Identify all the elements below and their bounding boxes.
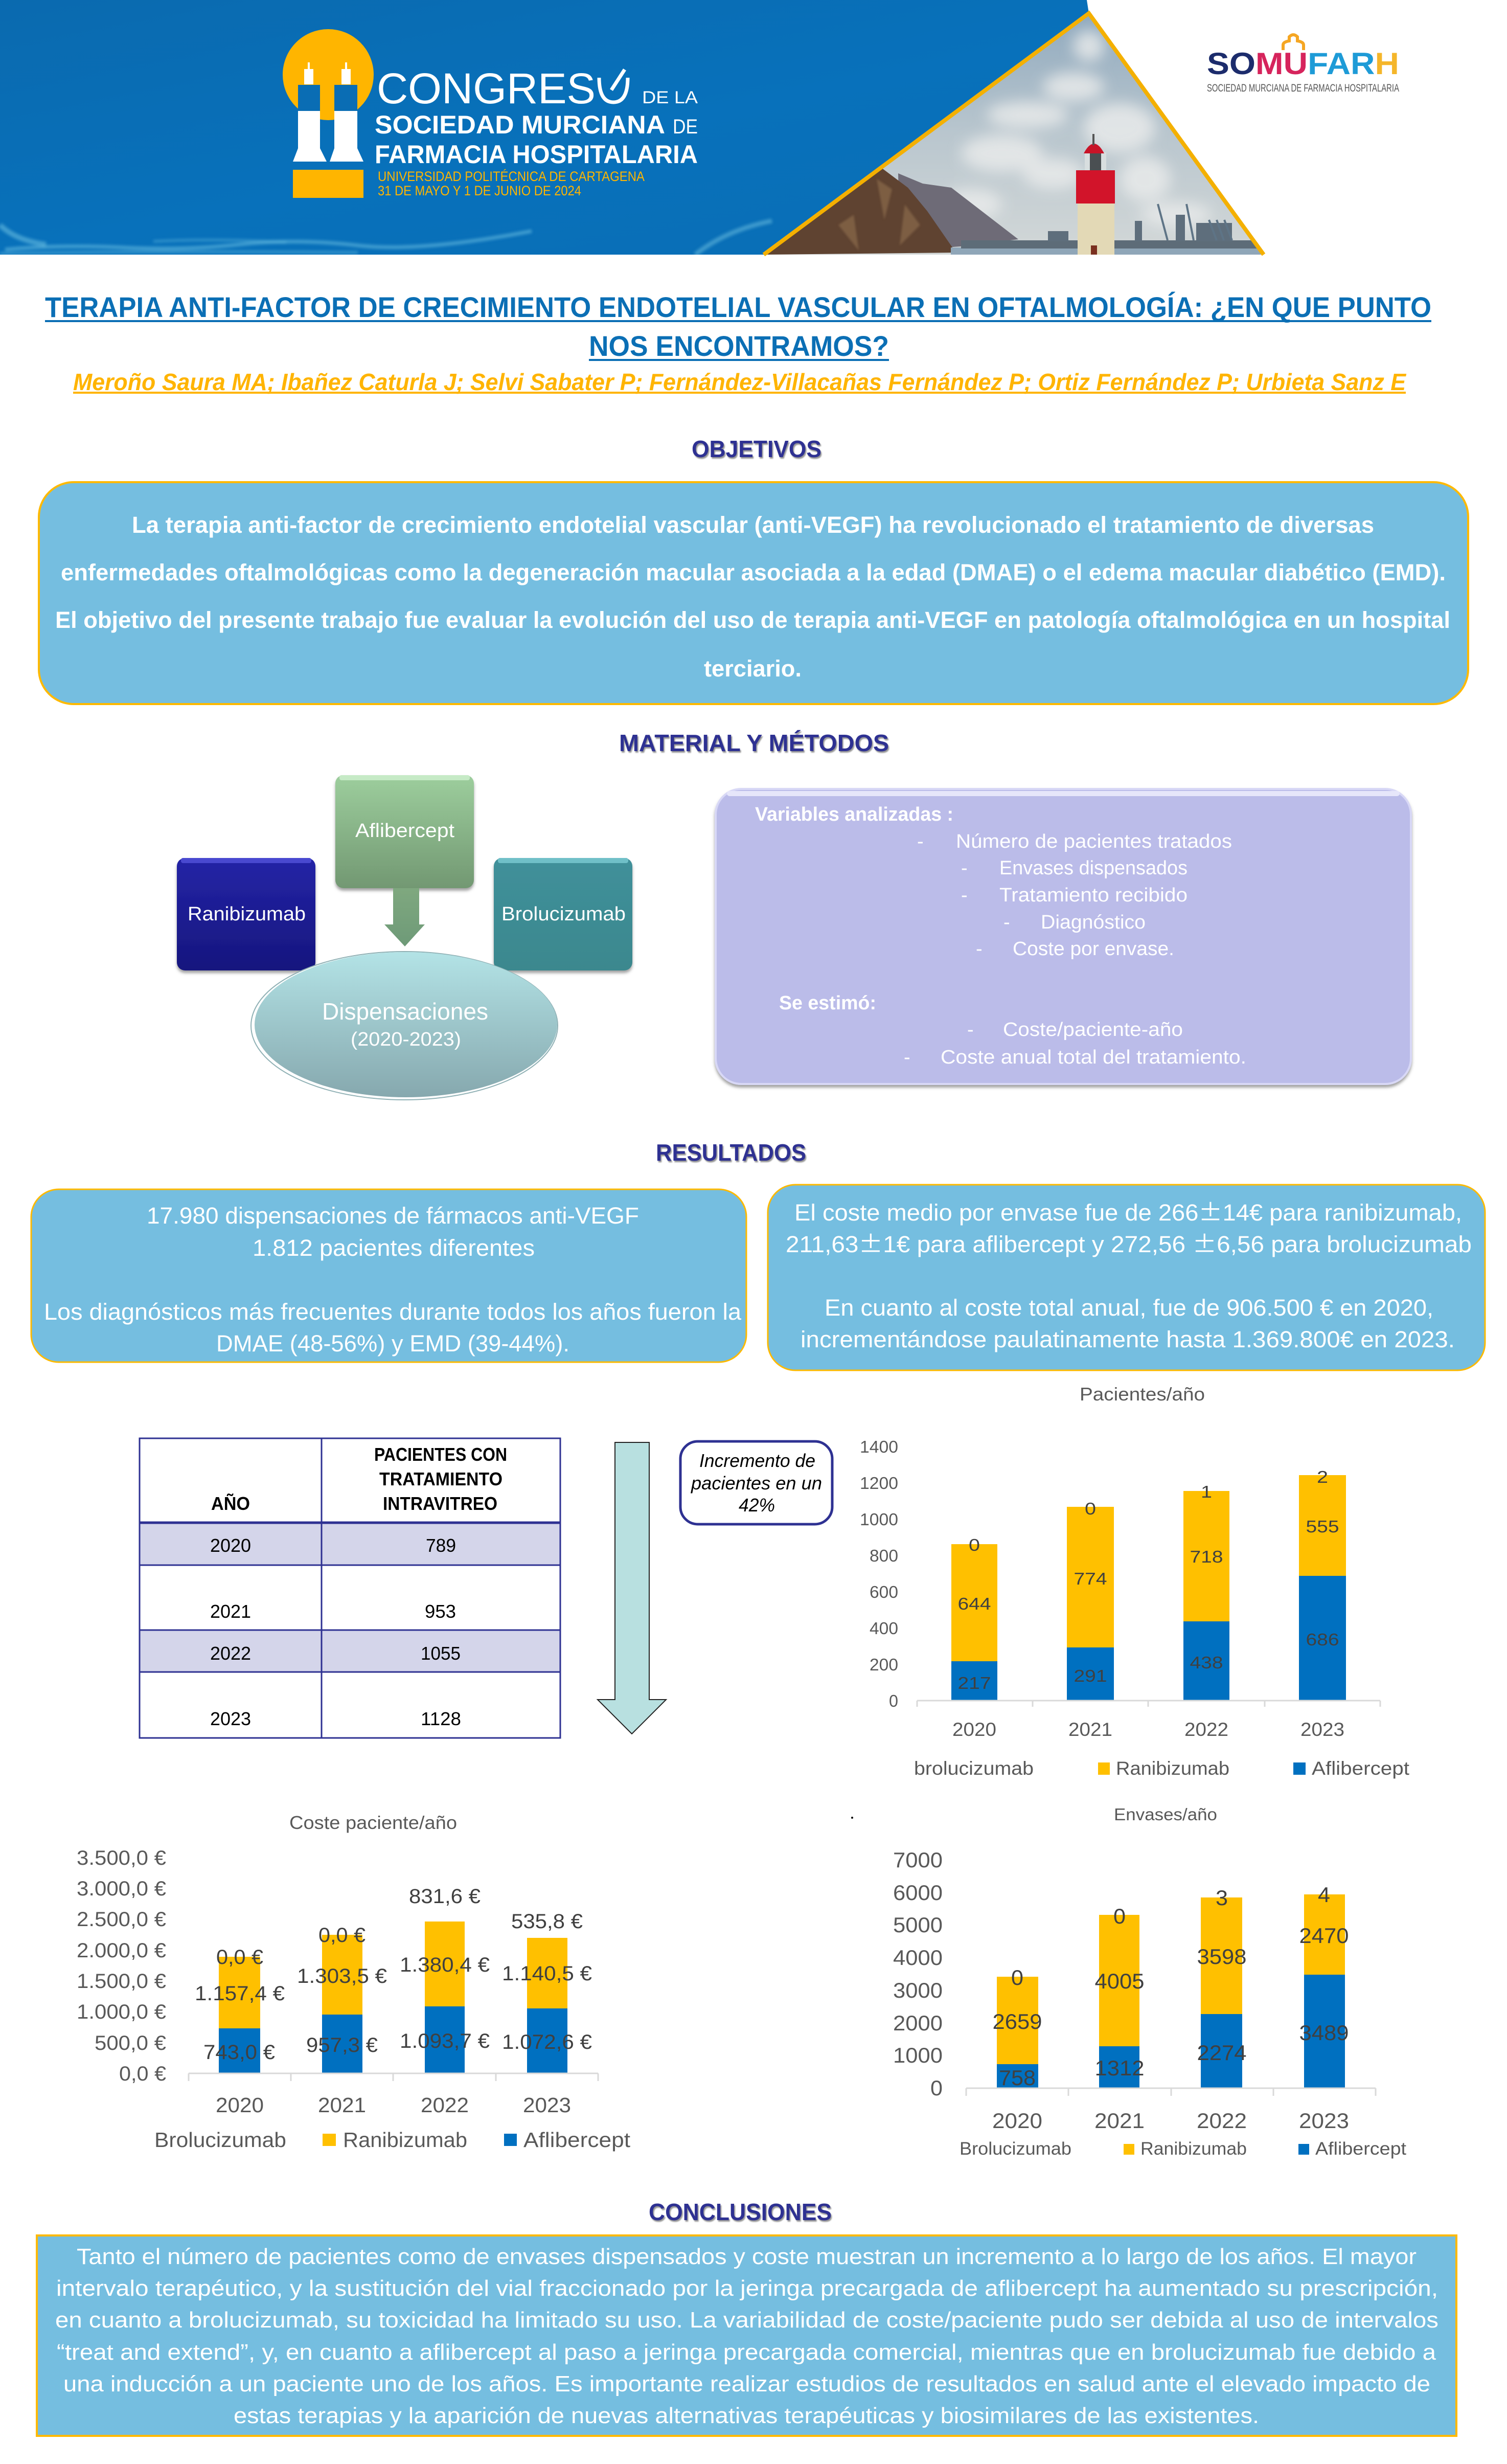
panel: variables analizadas: -	[917, 831, 924, 852]
chart: coste paciente/año: 3.500,0 €	[77, 1847, 166, 1869]
panel: resultados izquierda: 1.812 pacientes diferentes	[253, 1235, 535, 1261]
congress logo: UNIVERSIDAD POLITÉCNICA DE CARTAGENA	[378, 169, 645, 184]
chart: coste paciente/año: 1.157,4 €	[195, 1982, 285, 2005]
panel: variables analizadas: Número de pacientes tratados	[956, 831, 1232, 852]
chart: pacientes/año: 1000	[860, 1510, 898, 1529]
panel: variables analizadas: Envases dispensados	[999, 857, 1188, 879]
chart: coste paciente/año: 2.500,0 €	[77, 1908, 166, 1931]
panel: objetivos: La terapia anti-factor de crecimiento endotelial vascular (anti-VEGF) ha revolucionado el tratamiento de diversas	[132, 512, 1374, 538]
heading: resultados: RESULTADOS	[656, 1139, 806, 1166]
chart: envases/año: 2023	[1299, 2109, 1349, 2133]
panel: variables analizadas: -	[961, 885, 968, 906]
chart: coste paciente/año: Aflibercept	[523, 2128, 631, 2152]
panel: conclusiones: intervalo terapéutico, y la sustitución del vial fraccionado por la jeringa precargada de aflibercept ha aumentado su prescripción,	[56, 2276, 1438, 2301]
panel: variables analizadas	[716, 789, 1411, 1084]
panel: variables analizadas: -	[1003, 912, 1010, 933]
chart: envases/año	[851, 1805, 1406, 2159]
chart: envases/año: 4005	[1095, 1969, 1144, 1993]
header banner	[0, 0, 1089, 255]
chart: pacientes/año: 1	[1201, 1482, 1212, 1501]
chart: pacientes/año: 0	[969, 1535, 980, 1554]
authors: Meroño Saura MA; Ibañez Caturla J; Selvi Sabater P; Fernández-Villacañas Fernández P; Ortiz Fernández P; Urbieta Sanz E	[73, 369, 1406, 395]
chart: envases/año: 3598	[1197, 1945, 1246, 1969]
chart: pacientes/año: 2	[1317, 1467, 1328, 1486]
diagram: drugs to dispensations	[177, 775, 632, 1100]
congress logo	[283, 29, 698, 198]
table: pacientes con tratamiento intravitreo: AÑO	[211, 1493, 250, 1514]
chart: envases/año: 2022	[1197, 2109, 1247, 2133]
chart: pacientes/año: 600	[870, 1583, 898, 1601]
chart: pacientes/año: 800	[870, 1546, 898, 1565]
chart: pacientes/año: 2020	[952, 1719, 996, 1740]
chart: coste paciente/año: 743,0 €	[203, 2041, 275, 2064]
panel: resultados izquierda: Los diagnósticos más frecuentes durante todos los años fueron la	[44, 1299, 742, 1325]
chart: envases/año: 2659	[993, 2009, 1042, 2033]
table: pacientes con tratamiento intravitreo: INTRAVITREO	[383, 1493, 497, 1514]
table: pacientes con tratamiento intravitreo: 789	[426, 1535, 456, 1556]
chart: envases/año: 0	[1011, 1965, 1023, 1990]
chart: pacientes/año: 718	[1190, 1547, 1223, 1566]
callout: incremento 42%: Incremento de	[699, 1450, 815, 1471]
chart: coste paciente/año: 1.072,6 €	[502, 2031, 592, 2053]
chart: envases/año: Ranibizumab	[1140, 2139, 1247, 2159]
chart: envases/año: 2274	[1197, 2041, 1246, 2065]
chart: coste paciente/año: 1.303,5 €	[297, 1965, 387, 1987]
chart: pacientes/año: 438	[1190, 1653, 1223, 1672]
chart: coste paciente/año: 1.500,0 €	[77, 1970, 166, 1993]
box: Aflibercept: Aflibercept	[355, 820, 454, 842]
photo triangle: lighthouse of Cartagena	[757, 10, 1268, 256]
panel: resultados izquierda: 17.980 dispensaciones de fármacos anti-VEGF	[147, 1203, 639, 1229]
heading: objetivos: OBJETIVOS	[692, 436, 821, 462]
chart: envases/año: 2021	[1094, 2109, 1145, 2133]
panel: resultados derecha: incrementándose paulatinamente hasta 1.369.800€ en 2023.	[801, 1326, 1455, 1352]
chart: coste paciente/año: 0,0 €	[318, 1924, 366, 1947]
congress logo: DE	[673, 116, 698, 138]
congress logo: SOCIEDAD MURCIANA	[375, 110, 665, 139]
chart: pacientes/año: 2021	[1068, 1719, 1112, 1740]
callout: incremento 42%	[680, 1441, 832, 1524]
chart: pacientes/año: 200	[870, 1655, 898, 1674]
panel: resultados izquierda: DMAE (48-56%) y EMD (39-44%).	[216, 1330, 569, 1357]
chart: envases/año: 0	[930, 2076, 943, 2100]
title	[45, 291, 1431, 362]
panel: variables analizadas: Coste anual total del tratamiento.	[941, 1047, 1246, 1068]
chart: envases/año: 3000	[893, 1978, 943, 2002]
chart: pacientes/año: 2022	[1184, 1719, 1228, 1740]
congress logo: 31 DE MAYO Y 1 DE JUNIO DE 2024	[378, 183, 581, 198]
table: pacientes con tratamiento intravitreo: 1055	[421, 1643, 461, 1664]
chart: coste paciente/año: 3.000,0 €	[77, 1878, 166, 1900]
ellipse: dispensaciones: Dispensaciones	[322, 998, 488, 1025]
table: pacientes con tratamiento intravitreo: 2022	[210, 1643, 251, 1664]
panel: variables analizadas: -	[904, 1047, 910, 1068]
table: pacientes con tratamiento intravitreo: 2020	[210, 1535, 251, 1556]
chart: coste paciente/año: 2.000,0 €	[77, 1939, 166, 1962]
chart: envases/año: 4000	[893, 1946, 943, 1970]
panel: conclusiones: una inducción a un paciente uno de los años. Es importante realizar estudios de resultados en salud ante el elevado impacto de	[63, 2371, 1430, 2397]
chart: coste paciente/año: Coste paciente/año	[289, 1812, 457, 1833]
title: NOS ENCONTRAMOS?	[589, 330, 889, 362]
chart: pacientes/año: 555	[1306, 1517, 1339, 1536]
chart: pacientes/año: 1200	[860, 1474, 898, 1493]
chart: pacientes/año: 2023	[1300, 1719, 1344, 1740]
chart: envases/año: 1000	[893, 2043, 943, 2067]
chart: coste paciente/año: 2021	[318, 2093, 366, 2117]
title: TERAPIA ANTI-FACTOR DE CRECIMIENTO ENDOTELIAL VASCULAR EN OFTALMOLOGÍA: ¿EN QUE PUNTO	[45, 291, 1431, 323]
chart: coste paciente/año: 1.140,5 €	[502, 1962, 592, 1985]
chart: envases/año: Envases/año	[1114, 1805, 1217, 1824]
panel: resultados izquierda	[31, 1189, 746, 1362]
chart: coste paciente/año: Ranibizumab	[343, 2128, 467, 2152]
table: pacientes con tratamiento intravitreo	[140, 1438, 560, 1738]
chart: pacientes/año: 400	[870, 1619, 898, 1638]
chart: coste paciente/año: 1.093,7 €	[400, 2030, 490, 2052]
SOMUFARH logo: SOMUFARH	[1207, 47, 1399, 81]
ellipse: dispensaciones	[251, 952, 558, 1100]
ellipse: dispensaciones: (2020-2023)	[351, 1029, 461, 1050]
chart: pacientes/año: 0	[1085, 1499, 1096, 1518]
SOMUFARH logo	[1207, 35, 1399, 94]
panel: objetivos: enfermedades oftalmológicas como la degeneración macular asociada a la edad (DMAE) o el edema macular diabético (EMD).	[61, 559, 1446, 585]
callout: incremento 42%: pacientes en un	[691, 1473, 822, 1494]
chart: coste paciente/año: 2020	[216, 2093, 264, 2117]
panel: conclusiones: estas terapias y la aparición de nuevas alternativas terapéuticas y biosimilares de las existentes.	[234, 2403, 1259, 2428]
chart: pacientes/año: Ranibizumab	[1116, 1758, 1229, 1779]
chart: envases/año: 6000	[893, 1881, 943, 1905]
panel: resultados derecha: El coste medio por envase fue de 266 ±14€ para ranibizumab,	[794, 1194, 1462, 1227]
chart: coste paciente/año: 957,3 €	[306, 2034, 378, 2056]
chart: pacientes/año: brolucizumab	[914, 1758, 1034, 1779]
panel: resultados derecha: 211,63±1€ para aflibercept y 272,56 ±6,56 para brolucizumab	[786, 1226, 1472, 1259]
chart: coste paciente/año: 0,0 €	[119, 2063, 166, 2085]
panel: resultados derecha	[768, 1185, 1485, 1370]
chart: coste paciente/año: 1.000,0 €	[77, 2001, 166, 2023]
panel: objetivos: El objetivo del presente trabajo fue evaluar la evolución del uso de terapia anti-VEGF en patología oftalmológica en un hospital	[55, 607, 1450, 633]
panel: resultados derecha: En cuanto al coste total anual, fue de 906.500 € en 2020,	[825, 1295, 1433, 1321]
chart: pacientes/año: Aflibercept	[1312, 1758, 1410, 1779]
chart: pacientes/año: 0	[889, 1691, 898, 1710]
chart: envases/año: 7000	[893, 1848, 943, 1872]
panel: variables analizadas: Coste por envase.	[1013, 938, 1174, 960]
congress logo: FARMACIA HOSPITALARIA	[375, 140, 698, 169]
chart: pacientes/año: 217	[958, 1674, 991, 1692]
box: Brolucizumab	[494, 858, 632, 970]
heading: material y métodos: MATERIAL Y MÉTODOS	[619, 730, 889, 756]
chart: coste paciente/año: 2022	[421, 2093, 469, 2117]
SOMUFARH logo: SOCIEDAD MURCIANA DE FARMACIA HOSPITALARIA	[1207, 82, 1399, 94]
table: pacientes con tratamiento intravitreo: 1128	[421, 1708, 461, 1729]
congress logo: DE LA	[642, 88, 698, 107]
congress logo: CONGRES	[377, 64, 596, 112]
chart: coste paciente/año	[77, 1812, 631, 2152]
table: pacientes con tratamiento intravitreo: PACIENTES CON	[374, 1444, 507, 1465]
arrow: increment	[598, 1442, 666, 1734]
chart: coste paciente/año: 1.380,4 €	[400, 1954, 490, 1976]
chart: envases/año: 5000	[893, 1913, 943, 1937]
chart: envases/año: 758	[999, 2066, 1036, 2090]
chart: envases/año: Aflibercept	[1315, 2139, 1406, 2159]
chart: envases/año: 1312	[1095, 2056, 1144, 2080]
panel: variables analizadas: -	[961, 857, 968, 879]
table: pacientes con tratamiento intravitreo: 2021	[210, 1601, 251, 1622]
box: Ranibizumab	[177, 858, 315, 970]
panel: conclusiones: Tanto el número de pacientes como de envases dispensados y coste muestran un incremento a lo largo de los años. El mayor	[77, 2244, 1417, 2269]
chart: coste paciente/año: 831,6 €	[409, 1885, 481, 1908]
panel: conclusiones: “treat and extend”, y, en cuanto a aflibercept al paso a jeringa precargada comercial, mientras que en brolucizumab fue debido a	[57, 2340, 1436, 2365]
box: Aflibercept	[335, 775, 474, 888]
table: pacientes con tratamiento intravitreo: TRATAMIENTO	[379, 1468, 503, 1489]
panel: objetivos	[39, 482, 1468, 704]
chart: envases/año: 3489	[1299, 2021, 1349, 2045]
chart: envases/año: 2470	[1299, 1924, 1349, 1948]
chart: pacientes/año: 644	[958, 1594, 991, 1613]
chart: envases/año: 4	[1318, 1883, 1330, 1907]
chart: coste paciente/año: 0,0 €	[216, 1946, 263, 1969]
chart: coste paciente/año: 535,8 €	[511, 1910, 583, 1933]
panel: variables analizadas: -	[967, 1019, 974, 1041]
chart: pacientes/año: 774	[1074, 1569, 1107, 1588]
chart: pacientes/año: 1400	[860, 1437, 898, 1456]
box: Brolucizumab: Brolucizumab	[501, 903, 626, 925]
chart: pacientes/año: 291	[1074, 1666, 1107, 1685]
panel: variables analizadas: Diagnóstico	[1041, 912, 1146, 933]
table: pacientes con tratamiento intravitreo: 953	[425, 1601, 456, 1622]
chart: envases/año: 0	[1113, 1904, 1126, 1928]
panel: objetivos: terciario.	[704, 655, 802, 682]
callout: incremento 42%: 42%	[739, 1495, 775, 1516]
panel: variables analizadas: Tratamiento recibido	[999, 885, 1188, 906]
chart: coste paciente/año: 500,0 €	[95, 2032, 166, 2054]
arrow: to dispensaciones	[384, 888, 425, 946]
box: Ranibizumab: Ranibizumab	[188, 903, 306, 925]
chart: pacientes/año	[860, 1384, 1410, 1779]
chart: envases/año: 2000	[893, 2011, 943, 2035]
chart: pacientes/año: Pacientes/año	[1080, 1384, 1205, 1405]
panel: conclusiones	[37, 2235, 1456, 2436]
chart: envases/año: 2020	[992, 2109, 1042, 2133]
panel: variables analizadas: -	[976, 938, 983, 960]
chart: envases/año: 3	[1216, 1886, 1228, 1910]
heading: conclusiones: CONCLUSIONES	[649, 2199, 832, 2225]
panel: variables analizadas: Variables analizadas :	[755, 804, 953, 825]
panel: variables analizadas: Se estimó:	[779, 992, 876, 1014]
chart: envases/año: Brolucizumab	[960, 2139, 1071, 2159]
panel: conclusiones: en cuanto a brolucizumab, su toxicidad ha limitado su uso. La variabilidad de coste/paciente pudo ser debida al uso de intervalos	[55, 2308, 1438, 2333]
chart: pacientes/año: 686	[1306, 1630, 1339, 1649]
chart: coste paciente/año: Brolucizumab	[154, 2128, 286, 2152]
table: pacientes con tratamiento intravitreo: 2023	[210, 1708, 251, 1729]
chart: coste paciente/año: 2023	[523, 2093, 571, 2117]
panel: variables analizadas: Coste/paciente-año	[1003, 1019, 1183, 1041]
